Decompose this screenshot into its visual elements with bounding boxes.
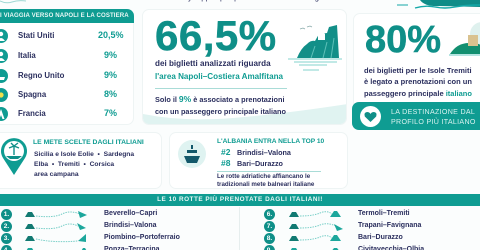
row: Italia bbox=[0, 49, 117, 63]
description: è legato a prenotazioni con un bbox=[364, 77, 472, 86]
route #2: #2 bbox=[221, 147, 230, 157]
row: Regno Unito: 9% bbox=[104, 70, 117, 80]
route #8: #8 bbox=[221, 158, 230, 168]
heading: L'ALBANIA ENTRA NELLA TOP 10 bbox=[217, 138, 324, 145]
route 1: Beverello–Capri bbox=[104, 210, 157, 217]
description bbox=[364, 66, 472, 98]
big number 80%: 80% bbox=[365, 19, 441, 61]
route list left bbox=[1, 209, 180, 250]
route 6: Termoli–Tremiti bbox=[358, 210, 410, 217]
route 1: 1. bbox=[4, 211, 9, 218]
row: Regno Unito: Regno Unito bbox=[18, 71, 64, 80]
row: Spagna bbox=[0, 88, 117, 102]
row: Regno Unito bbox=[0, 69, 117, 83]
route 3 bbox=[1, 233, 180, 244]
route 8 bbox=[264, 233, 403, 244]
panel: Albania in the top 10 bbox=[169, 132, 348, 189]
decorative island top right bbox=[397, 0, 480, 9]
route 8: Bari–Durazzo bbox=[358, 234, 403, 241]
row: Stati Uniti: Stati Uniti bbox=[18, 31, 54, 40]
decorative glow bbox=[470, 22, 480, 44]
route 4 bbox=[1, 245, 160, 250]
note: tradizionali mete balneari italiane bbox=[217, 181, 314, 188]
route 6: 6. bbox=[267, 211, 272, 218]
heading: LE METE SCELTE DAGLI ITALIANI bbox=[33, 139, 144, 146]
row: Francia bbox=[0, 107, 117, 121]
wave background bbox=[143, 104, 346, 124]
country table bbox=[0, 29, 124, 121]
row: Spagna: Spagna bbox=[18, 90, 46, 99]
panel: who travels to Naples bbox=[0, 9, 134, 125]
callout text bbox=[391, 108, 476, 126]
route #2 bbox=[221, 147, 291, 157]
icon: ferry bbox=[178, 140, 206, 168]
route 6 bbox=[264, 209, 410, 220]
note: Le rotte adriatiche affiancano le bbox=[217, 173, 310, 180]
note bbox=[217, 173, 314, 188]
decorative waves top left bbox=[0, 0, 26, 4]
description: l'area Napoli–Costiera Amalfitana bbox=[155, 72, 283, 81]
row: Francia: 7% bbox=[104, 108, 117, 118]
illustration: island bbox=[288, 25, 342, 71]
route 9 bbox=[264, 245, 424, 250]
row: Spagna: 8% bbox=[104, 89, 117, 99]
row: Italia: 9% bbox=[104, 50, 117, 60]
section header: top 10 routes bbox=[0, 194, 480, 206]
callout: most Italian destination bbox=[352, 102, 480, 130]
route 3: Piombino–Portoferraio bbox=[104, 234, 180, 241]
route #8 bbox=[221, 158, 283, 168]
row: Italia: Italia bbox=[18, 51, 36, 60]
route 8: 8. bbox=[267, 235, 272, 242]
route 2: Brindisi–Valona bbox=[104, 222, 157, 229]
note: Solo il 9% è associato a prenotazioni bbox=[155, 94, 284, 104]
note bbox=[155, 94, 286, 116]
icon: map pin palm bbox=[1, 138, 27, 175]
callout text: LA DESTINAZIONE DAL bbox=[391, 108, 475, 116]
description: passeggero principale italiano bbox=[364, 89, 472, 98]
description: dei biglietti per le Isole Tremiti bbox=[364, 66, 472, 75]
panel heading: travel to Naples bbox=[0, 9, 134, 23]
route list right bbox=[264, 209, 424, 250]
route 2: 2. bbox=[4, 223, 9, 230]
panel: Napoli statistic bbox=[142, 9, 347, 125]
divider bbox=[217, 171, 321, 172]
divider bbox=[155, 88, 287, 89]
illustration: castle island bbox=[449, 35, 480, 56]
route #8: Bari–Durazzo bbox=[237, 159, 283, 168]
destinations list: Elba • Tremiti • Corsica bbox=[34, 161, 114, 168]
panel: destinations chosen by Italians bbox=[0, 132, 162, 189]
route 7: 7. bbox=[267, 223, 272, 230]
panel heading: travel to Naples: I VIAGGIA VERSO NAPOLI E LA COSTIERA bbox=[0, 12, 129, 19]
route 7 bbox=[264, 221, 422, 232]
row: Francia: Francia bbox=[18, 109, 46, 118]
section header: top 10 routes: LE 10 ROTTE PIÙ PRENOTATE DAGLI ITALIANI! bbox=[157, 196, 323, 203]
route 3: 3. bbox=[4, 235, 9, 242]
destinations list: Sicilia e Isole Eolie • Sardegna bbox=[34, 151, 134, 158]
description bbox=[155, 59, 284, 81]
destinations list: area campana bbox=[34, 171, 79, 178]
icon: heart bbox=[360, 106, 381, 127]
big number 66,5%: 66,5% bbox=[155, 12, 277, 59]
row: Stati Uniti: 20,5% bbox=[98, 30, 124, 40]
route 1 bbox=[1, 209, 157, 220]
route #2: Brindisi–Valona bbox=[237, 148, 291, 157]
note: con un passeggero principale italiano bbox=[155, 106, 286, 116]
panel: Tremiti statistic bbox=[353, 13, 480, 129]
callout text: PROFILO PIÙ ITALIANO bbox=[391, 118, 476, 126]
route 7: Trapani–Favignana bbox=[358, 222, 421, 229]
description: dei biglietti analizzati riguarda bbox=[155, 59, 271, 68]
route 2 bbox=[1, 221, 157, 232]
row: Stati Uniti bbox=[0, 29, 124, 43]
destinations list bbox=[34, 151, 134, 178]
